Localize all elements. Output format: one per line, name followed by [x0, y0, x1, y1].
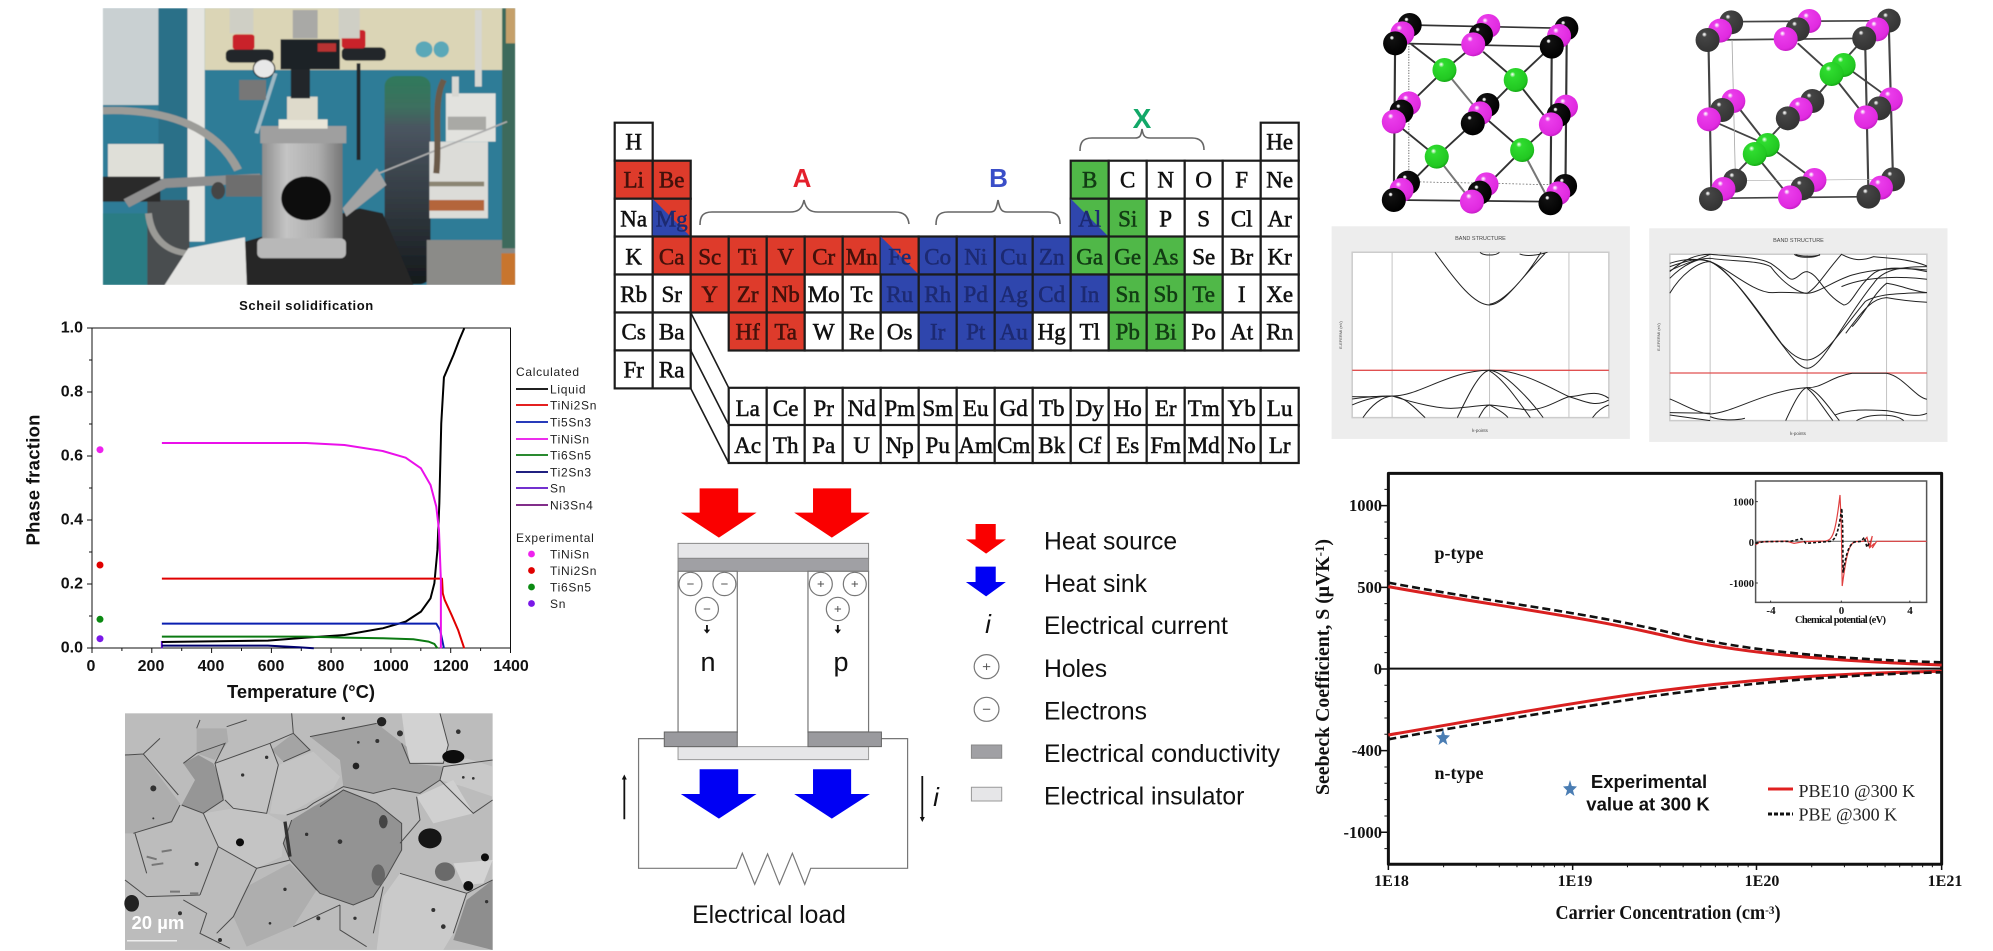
row 5: Sb [1154, 282, 1178, 307]
bottom conductors [664, 732, 881, 747]
x tick labels: 1E18 [1374, 873, 1409, 890]
actinides: Pa [812, 433, 835, 458]
row 6: Pt [966, 320, 986, 344]
y axis label: E-EFERMI (eV) [1656, 322, 1661, 351]
label X: X [1133, 103, 1152, 134]
actinides: Th [773, 433, 799, 458]
electrons and holes circles [679, 572, 866, 621]
row 4: V [777, 244, 794, 270]
row 7: Fr [623, 357, 644, 382]
inset x axis title: Chemical potential (eV) [1795, 615, 1886, 626]
lanthanides: Pm [884, 396, 915, 421]
x tick labels [87, 658, 529, 675]
row 2: F [1235, 168, 1248, 193]
row 6: Ir [930, 320, 946, 344]
inset y tick labels [1730, 498, 1754, 590]
lanthanides: Lu [1267, 396, 1293, 421]
scale bar [127, 940, 177, 942]
row 5 [615, 274, 1299, 312]
row 7: Ra [659, 357, 684, 382]
actinides: Md [1188, 433, 1220, 458]
row 5: I [1238, 282, 1246, 307]
legend icons [966, 524, 1006, 801]
x axis label: k-points [1790, 431, 1807, 436]
chart legend: Ti2Sn3 [550, 466, 592, 480]
inset x tick labels: -4 [1766, 605, 1776, 617]
y tick labels: 0.2 [61, 576, 83, 592]
heat sink arrows [681, 769, 870, 819]
chart: Scheil solidification phase fractions [22, 320, 597, 702]
y tick labels: 0.0 [61, 640, 83, 656]
charge-motion arrows [704, 625, 841, 634]
label experimental value: value at 300 K [1586, 794, 1710, 814]
label n: n [700, 647, 716, 677]
row 5: Cd [1038, 282, 1066, 307]
top plates [678, 543, 869, 571]
row 4: Kr [1268, 244, 1292, 270]
row 4: Cu [1000, 244, 1028, 270]
row 4: Se [1192, 244, 1215, 270]
row 2: B [1082, 168, 1097, 193]
y axis title: ) [1312, 539, 1334, 546]
row 2: C [1120, 168, 1135, 193]
label p-type: p-type [1434, 543, 1484, 563]
diagram legend [966, 524, 1281, 810]
row 4: Ge [1114, 244, 1141, 270]
row 1 [615, 123, 1299, 161]
chart: Seebeck coefficient vs carrier concentration [1312, 473, 1962, 924]
wire and resistor [639, 739, 908, 884]
row 4: Mn [846, 244, 878, 270]
n and p legs [678, 571, 869, 732]
row 6: Tl [1079, 320, 1100, 344]
chart legend: Ti6Sn5 [550, 580, 592, 594]
actinides: Es [1116, 433, 1139, 458]
row 3: Cl [1231, 207, 1253, 232]
x tick labels: 1000 [373, 658, 409, 675]
atoms [1696, 9, 1905, 211]
heat source arrows [681, 488, 870, 538]
row 5: Tc [850, 282, 873, 307]
row 6: Re [849, 320, 874, 344]
lanthanides: Sm [922, 396, 953, 421]
lanthanides: Er [1155, 396, 1177, 421]
row 3 [615, 199, 1299, 237]
row 6: Os [887, 320, 913, 344]
row 2: Ne [1266, 168, 1293, 193]
y tick labels: -400 [1352, 741, 1382, 760]
current arrowheads [622, 774, 925, 822]
micrograph: grain structure [120, 700, 493, 950]
thermoelectric module diagram [622, 488, 940, 929]
x tick labels: 1400 [493, 658, 529, 675]
label A: A [793, 163, 812, 193]
chart legend: Calculated [516, 365, 580, 379]
actinides: Am [958, 433, 993, 458]
row 6: Bi [1155, 320, 1177, 344]
chart legend: Ni3Sn4 [550, 498, 594, 512]
label current i: i [933, 782, 940, 812]
row 5: Rh [924, 282, 952, 307]
f-block connector lines [691, 312, 729, 463]
panel: band structure left [1332, 226, 1630, 439]
chart legend: Experimental [516, 531, 594, 545]
chart legend: Ti5Sn3 [550, 416, 592, 430]
row 5: Sn [1116, 282, 1140, 307]
row 6: Hf [736, 320, 760, 344]
photo: arc-melting furnace laboratory setup [103, 8, 515, 285]
actinides: Bk [1038, 433, 1066, 458]
lanthanides: Yb [1228, 396, 1256, 421]
lanthanides: Tm [1188, 396, 1220, 421]
legend labels: Electrical conductivity [1044, 741, 1281, 768]
row 5: Pd [964, 282, 988, 307]
signs in circles [687, 581, 858, 612]
x axis label: k-points [1472, 428, 1489, 433]
chart title: BAND STRUCTURE [1455, 236, 1506, 242]
actinides: No [1228, 433, 1256, 458]
row 6: At [1230, 320, 1254, 344]
legend labels: Heat sink [1044, 571, 1148, 598]
bracket group: X [1080, 103, 1204, 151]
row 5: Ag [1000, 282, 1028, 307]
actinides: Pu [926, 433, 950, 458]
row 2: Li [623, 168, 644, 193]
y tick labels: 0 [1374, 660, 1382, 678]
lanthanides [729, 388, 1299, 426]
experimental points [96, 446, 104, 642]
row 5: Te [1192, 282, 1215, 307]
PBE10 curves [1388, 587, 1942, 735]
row 5: Zr [737, 282, 759, 307]
legend PBE: PBE @300 K [1798, 804, 1897, 824]
row 2: O [1195, 168, 1212, 193]
legend PBE10: PBE10 @300 K [1798, 781, 1915, 801]
row 3: Na [620, 207, 647, 232]
legend labels: Electrons [1044, 698, 1147, 726]
y tick labels: -1000 [1344, 823, 1382, 842]
lanthanides: Pr [813, 396, 834, 421]
scale bar label: 20 µm [132, 912, 184, 933]
row 6: W [813, 320, 835, 344]
row 2: N [1157, 168, 1174, 193]
row 4: Ni [964, 244, 987, 270]
x axis title: -3 [1765, 903, 1774, 917]
y tick labels [1344, 496, 1382, 842]
lanthanides: Nd [848, 396, 876, 421]
bracket group: B [936, 163, 1060, 225]
row 5: Y [701, 282, 718, 307]
actinides: Cf [1078, 433, 1102, 458]
x tick labels: 0 [87, 658, 96, 675]
lanthanides: Dy [1076, 396, 1104, 421]
x tick labels: 600 [258, 658, 284, 675]
row 6: Pb [1116, 320, 1140, 344]
lanthanides: Eu [963, 396, 989, 421]
inset x tick labels: 0 [1839, 605, 1845, 617]
row 3: Al [1078, 207, 1101, 232]
x tick labels: 1E20 [1745, 873, 1779, 890]
actinides: Np [886, 433, 914, 458]
row 4: Co [924, 244, 951, 270]
row 4: Cr [812, 244, 836, 270]
row 6: Rn [1266, 320, 1294, 344]
row 5: Sr [661, 282, 682, 307]
x tick labels: 1E21 [1928, 873, 1962, 890]
row 6 [615, 312, 1299, 350]
bottom insulator [678, 747, 869, 760]
row 4 [615, 236, 1299, 274]
phase curves [162, 328, 464, 648]
crystal structure left [1382, 13, 1578, 215]
unit-cell frame and bonds [1708, 21, 1893, 199]
lanthanides: Gd [1000, 396, 1028, 421]
legend labels: Heat source [1044, 528, 1177, 556]
bracket group: A [700, 163, 909, 225]
inset x tick labels: 4 [1907, 605, 1913, 617]
actinides: Lr [1269, 433, 1291, 458]
y axis title: -1 [1312, 546, 1327, 556]
row 2 [615, 161, 1299, 199]
crystal structure right [1696, 9, 1905, 211]
row 6: Po [1192, 320, 1216, 344]
atoms [1382, 13, 1578, 215]
row 4: Ga [1076, 244, 1103, 270]
chart legend [516, 365, 597, 611]
panel: band structure right [1649, 228, 1947, 442]
lanthanides: La [736, 396, 760, 421]
y tick labels: 1000 [1349, 496, 1382, 515]
actinides: Fm [1150, 433, 1181, 458]
x axis title: ) [1774, 903, 1780, 924]
row 6: Au [1000, 320, 1028, 344]
y axis title: Phase fraction [22, 414, 44, 546]
legend experimental star [1563, 780, 1577, 796]
row 4: Sc [698, 244, 721, 270]
label p: p [833, 647, 849, 677]
actinides [729, 425, 1299, 463]
row 6: Cs [622, 320, 646, 344]
chart legend: TiNiSn [550, 432, 590, 446]
x tick labels: 800 [318, 658, 344, 675]
x tick labels: 1200 [433, 658, 469, 675]
row 3: S [1197, 207, 1210, 232]
chart legend: TiNi2Sn [550, 398, 597, 412]
label experimental value: Experimental [1591, 771, 1707, 792]
chart legend: Sn [550, 597, 566, 611]
lanthanides: Tb [1039, 396, 1064, 421]
x tick labels: 400 [198, 658, 224, 675]
legend labels [1044, 528, 1281, 810]
row 3: Si [1118, 207, 1137, 232]
row 4: K [625, 244, 642, 270]
chart legend: Liquid [550, 382, 586, 396]
chart legend: TiNiSn [550, 548, 590, 562]
lanthanides: Ce [773, 396, 798, 421]
experimental point star [1436, 729, 1450, 745]
row 1: He [1266, 130, 1293, 155]
row 6: Ta [774, 320, 797, 344]
x tick labels: 1E19 [1558, 873, 1592, 890]
y tick labels: 1.0 [61, 320, 83, 336]
row 6: Ba [659, 320, 684, 344]
x tick labels: 200 [138, 658, 164, 675]
row 1: H [625, 130, 642, 155]
legend labels: Holes [1044, 656, 1107, 683]
y tick labels: 500 [1357, 578, 1382, 597]
actinides: U [853, 433, 870, 458]
y axis label: E-EFERMI (eV) [1338, 320, 1343, 349]
unit-cell frame and bonds [1394, 25, 1567, 202]
PBE curves [1388, 583, 1942, 739]
inset chart: Seebeck vs chemical potential [1730, 481, 1927, 626]
heading: Scheil solidification: Scheil solidification [239, 298, 374, 313]
x axis title: Carrier Concentration (cm [1556, 903, 1780, 924]
row 2: Be [659, 168, 684, 193]
row 4: Fe [888, 244, 911, 270]
y tick labels: 0.8 [61, 384, 83, 400]
chart title: BAND STRUCTURE [1773, 238, 1824, 244]
row 4: Ti [738, 244, 758, 270]
chart legend: Sn [550, 482, 566, 496]
chart axes and ticks [87, 328, 510, 653]
row 4: Br [1230, 244, 1254, 270]
chart legend: TiNi2Sn [550, 564, 597, 578]
row 6: Hg [1038, 320, 1066, 344]
row 4: Ca [659, 244, 684, 270]
row 5: Rb [620, 282, 647, 307]
y tick labels: 0.6 [61, 448, 83, 464]
actinides: Ac [734, 433, 761, 458]
row 5: Ru [886, 282, 914, 307]
periodic table [615, 123, 1299, 463]
frame and ticks [1388, 473, 1942, 864]
lanthanides: Ho [1114, 396, 1142, 421]
legend labels: Electrical current [1044, 613, 1228, 640]
inset x tick labels [1766, 605, 1913, 617]
row 3: P [1159, 207, 1172, 232]
row 5: In [1080, 282, 1100, 307]
y axis title: Seebeck Coefficient, S (μVK [1312, 554, 1334, 795]
y tick labels: 0.4 [61, 512, 83, 528]
row 4: Zn [1039, 244, 1065, 270]
legend i glyph: i [985, 609, 992, 639]
x tick labels [1374, 873, 1962, 890]
row 4: As [1153, 244, 1179, 270]
inset y tick labels: 0 [1749, 538, 1754, 549]
row 5: Nb [772, 282, 800, 307]
row 3: Ar [1268, 207, 1292, 232]
row 7 [615, 350, 691, 388]
label electrical load: Electrical load [692, 902, 846, 929]
actinides: Cm [997, 433, 1030, 458]
chart legend: Ti6Sn5 [550, 448, 592, 462]
label B: B [989, 163, 1008, 193]
current direction arrows [624, 776, 922, 819]
inset y tick labels: -1000 [1730, 579, 1754, 590]
x axis title: Temperature (°C) [227, 682, 375, 702]
row 5: Mo [808, 282, 840, 307]
row 3: Mg [656, 207, 688, 232]
row 5: Xe [1266, 282, 1293, 307]
y tick labels [61, 320, 83, 656]
inset y tick labels: 1000 [1733, 498, 1754, 508]
label n-type: n-type [1434, 763, 1484, 783]
legend labels: Electrical insulator [1044, 784, 1244, 810]
